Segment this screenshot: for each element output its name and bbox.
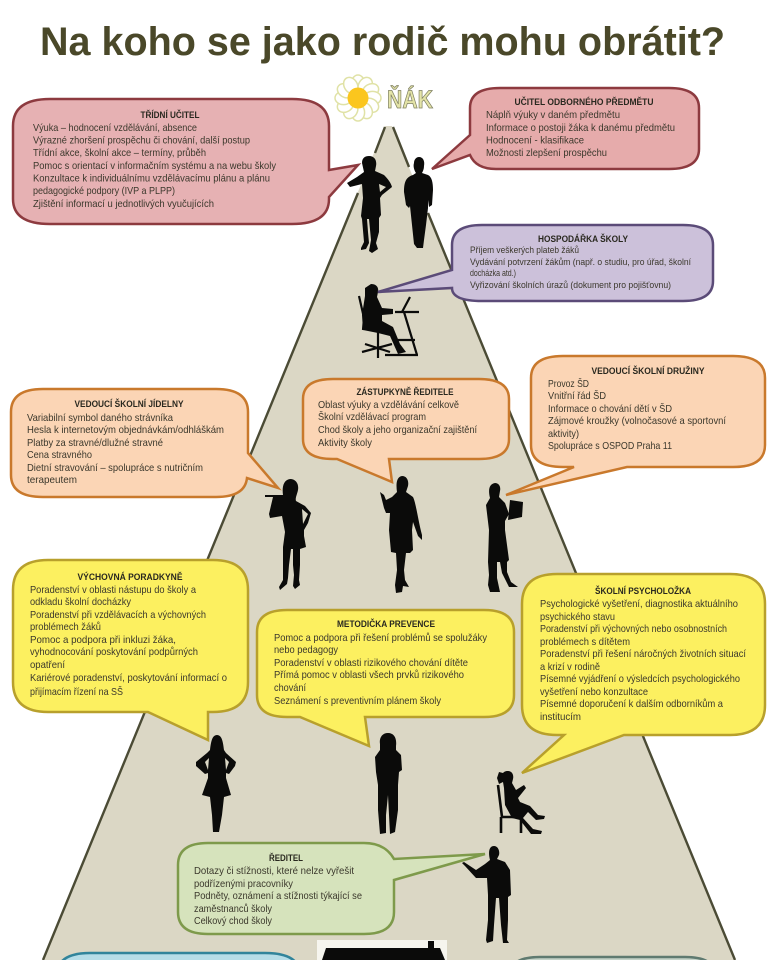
title: Na koho se jako rodič mohu obrátit? (40, 20, 725, 64)
panel: subject teacher (432, 88, 699, 169)
panel: guidance counsellor (13, 560, 248, 740)
figure: subject teacher man (404, 157, 433, 248)
text block: odkladu školní docházky (30, 597, 132, 608)
text block: institucím (540, 712, 581, 723)
text block: Poradenství v oblasti nástupu do školy a (30, 585, 196, 596)
text block: zaměstnanců školy (194, 903, 273, 915)
text block: Konzultace k individuálnímu vzdělávacímu plánu a plánu (33, 174, 270, 184)
heading: TŘÍDNÍ UČITEL (140, 109, 200, 121)
bubble shape (432, 88, 699, 169)
text block: pedagogické podpory (IVP a PLPP) (33, 186, 175, 197)
text block: psychického stavu (540, 612, 615, 623)
text block: Pomoc a podpora při inkluzi žáka, (30, 635, 176, 646)
text block (274, 632, 488, 707)
bubble shape (11, 389, 278, 497)
text block (548, 377, 726, 452)
text block: Třídní akce, školní akce – termíny, průběh (33, 147, 206, 159)
bubble shape (522, 574, 765, 773)
text block: Informace o chování dětí v ŠD (548, 402, 672, 415)
text block: Poradenství v oblasti rizikového chování dítěte (274, 658, 468, 669)
text block (27, 413, 224, 486)
text block: Spolupráce s OSPOD Praha 11 (548, 441, 672, 452)
text block: Vydávání potvrzení žákům (např. o studiu, pro úřad, školní (470, 257, 691, 268)
text block: Vnitřní řád ŠD (548, 389, 606, 402)
icon: folder (508, 500, 523, 520)
text block: vyšetření nebo konzultace (540, 687, 648, 698)
panel: bursar (378, 225, 713, 301)
text block: přijímacím řízení na SŠ (30, 685, 123, 698)
text block: Dietní stravování – spolupráce s nutričním (27, 463, 203, 474)
text block: Písemné doporučení k dalším odborníkům a (540, 698, 723, 710)
text block: Dotazy či stížnosti, které nelze vyřešit (194, 866, 354, 877)
bubble shape (13, 99, 358, 224)
panel: prevention specialist (257, 610, 514, 746)
heading: VEDOUCÍ ŠKOLNÍ JÍDELNY (74, 398, 184, 410)
logo: daisy and NAK (335, 75, 433, 121)
figure: guidance counsellor (196, 735, 236, 832)
panel: canteen manager (11, 389, 278, 497)
text block (486, 110, 675, 159)
heading: VÝCHOVNÁ PORADKYNĚ (78, 571, 183, 583)
figure: class teacher woman (347, 156, 392, 253)
text block: Podněty, oznámení a stížnosti týkající se (194, 891, 362, 902)
panel: cut-off blue bubble (57, 953, 300, 960)
text block: Platby za stravné/dlužné stravné (27, 438, 163, 449)
text block: Variabilní symbol daného strávníka (27, 413, 173, 424)
text block: Možnosti zlepšení prospěchu (486, 148, 607, 159)
text block: Hesla k internetovým objednávkám/odhláškám (27, 425, 224, 436)
text block: Pomoc a podpora při řešení problémů se spolužáky (274, 632, 488, 644)
text block: Poradenství při řešení náročných životních situací (540, 649, 746, 660)
figure: deputy head (380, 476, 422, 593)
bubble shape (378, 225, 713, 301)
text block (540, 599, 746, 723)
text block: Náplň výuky v daném předmětu (486, 110, 620, 121)
text block: Chod školy a jeho organizační zajištění (318, 425, 477, 436)
text block: aktivity) (548, 429, 579, 440)
text block: Aktivity školy (318, 438, 373, 449)
text block: Písemné vyjádření o výsledcích psychologického (540, 674, 740, 685)
text block: problémech s dítětem (540, 637, 630, 648)
text block: docházka atd.) (470, 268, 516, 279)
text block: Provoz ŠD (548, 377, 589, 390)
logo text: ŇÁK (387, 84, 433, 114)
text block: Seznámení s preventivním plánem školy (274, 696, 442, 707)
figure: after-school club manager with folder (486, 483, 523, 592)
icon: daisy flower (335, 75, 381, 121)
bubble shape (178, 843, 485, 934)
figure: head teacher (462, 846, 511, 943)
text block: Příjem veškerých plateb žáků (470, 245, 579, 256)
text block: Vyřizování školních úrazů (dokument pro pojišťovnu) (470, 280, 671, 291)
heading: ŘEDITEL (269, 852, 303, 864)
text block: terapeutem (27, 475, 77, 486)
text block: Psychologické vyšetření, diagnostika aktuálního (540, 599, 738, 610)
text block: Zájmové kroužky (volnočasové a sportovní (548, 416, 726, 427)
text block: Poradenství při výchovných nebo osobnostních (540, 624, 727, 635)
text block: Celkový chod školy (194, 916, 273, 927)
heading: METODIČKA PREVENCE (337, 618, 436, 630)
text block: Hodnocení - klasifikace (486, 136, 584, 147)
text block: Cena stravného (27, 450, 92, 461)
text block: Přímá pomoc v oblasti všech prvků rizikového (274, 669, 464, 681)
text block: Školní vzdělávací program (318, 410, 426, 423)
figure: canteen manager (265, 479, 311, 590)
text block (194, 866, 362, 927)
heading: VEDOUCÍ ŠKOLNÍ DRUŽINY (592, 365, 705, 377)
text block: Výrazné zhoršení prospěchu či chování, další postup (33, 136, 250, 147)
panel: after-school club manager (506, 356, 765, 495)
text block: Informace o postoji žáka k danému předmětu (486, 123, 675, 134)
panel: class teacher (13, 99, 358, 224)
text block (318, 400, 477, 449)
text block: vyhodnocování poskytování podpůrných (30, 646, 198, 658)
panel: head teacher (178, 843, 485, 934)
text block (33, 123, 277, 210)
bubble shape (13, 560, 248, 740)
heading: HOSPODÁŘKA ŠKOLY (538, 233, 629, 245)
text block: problémech žáků (30, 621, 101, 633)
panel: deputy head (303, 379, 509, 482)
pyramid background (43, 126, 735, 960)
text block: Zjištění informací u jednotlivých vyučujících (33, 199, 214, 210)
bubble shape (506, 356, 765, 495)
text block: nebo pedagogy (274, 645, 339, 656)
text block: opatření (30, 660, 65, 671)
bubble shape (303, 379, 509, 482)
text block: a krizí v rodině (540, 662, 600, 673)
figure: school psychologist seated (497, 771, 545, 834)
text block: Pomoc s orientací v informačním systému a na webu školy (33, 161, 277, 172)
panel: school psychologist (522, 574, 765, 773)
text block (470, 245, 691, 291)
text block: Kariérové poradenství, poskytování informací o (30, 673, 227, 684)
heading: ZÁSTUPKYNĚ ŘEDITELE (356, 386, 454, 398)
panel: cut-off grey-green bubble (510, 957, 715, 960)
figure: bursar at desk (359, 284, 419, 358)
icon: school building roof (317, 940, 447, 960)
text block: Výuka – hodnocení vzdělávání, absence (33, 123, 197, 134)
heading: UČITEL ODBORNÉHO PŘEDMĚTU (514, 96, 654, 108)
heading: ŠKOLNÍ PSYCHOLOŽKA (595, 585, 691, 597)
text block: Poradenství při vzdělávacích a výchovných (30, 610, 206, 621)
bubble shape (257, 610, 514, 746)
text block: podřízenými pracovníky (194, 879, 294, 890)
text block: Oblast výuky a vzdělávání celkově (318, 400, 459, 411)
text block (30, 585, 227, 698)
text block: chování (274, 683, 306, 694)
figure: prevention specialist (375, 733, 402, 834)
